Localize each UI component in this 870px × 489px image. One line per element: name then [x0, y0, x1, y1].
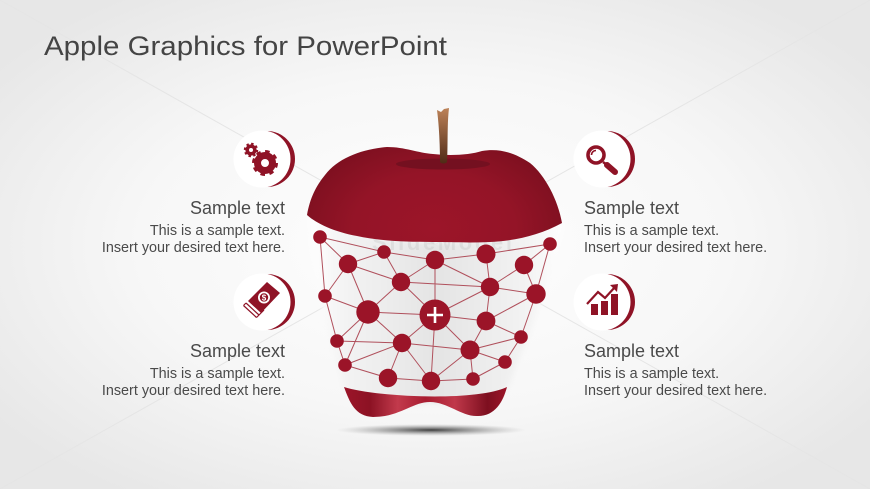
plus sign	[427, 307, 443, 323]
text block: top right: Insert your desired text here.	[584, 240, 767, 256]
text block: top right: Sample text	[584, 198, 679, 218]
text block: bottom right: This is a sample text.	[584, 366, 719, 382]
apple body	[310, 215, 563, 405]
network lines	[320, 237, 550, 381]
text block: top left: This is a sample text.	[150, 223, 285, 239]
text block: bottom left: This is a sample text.	[150, 366, 285, 382]
text block: bottom right: Sample text	[584, 341, 679, 361]
title: Apple Graphics for PowerPoint	[44, 31, 448, 61]
top red section	[307, 147, 562, 242]
apple graphic	[307, 108, 563, 436]
text block: top right	[584, 198, 767, 256]
text block: top left	[102, 198, 285, 256]
network nodes	[313, 230, 557, 390]
text block: bottom right: Insert your desired text here.	[584, 383, 767, 399]
text block: bottom left	[102, 341, 285, 399]
stem	[437, 108, 449, 164]
icon: money	[234, 274, 295, 330]
icon: growth chart	[574, 274, 635, 330]
icon: magnifier	[574, 130, 635, 188]
text block: bottom left: Insert your desired text here.	[102, 383, 285, 399]
icon: gears	[234, 130, 295, 188]
ground shadow	[336, 424, 526, 436]
text block: top left: Sample text	[190, 198, 285, 218]
icon: money: $	[262, 294, 267, 302]
stem shadow	[396, 158, 490, 170]
bottom red section	[344, 387, 507, 417]
text block: top left: Insert your desired text here.	[102, 240, 285, 256]
text block: bottom right	[584, 341, 767, 399]
text block: bottom left: Sample text	[190, 341, 285, 361]
watermark: SlideModel	[372, 230, 512, 255]
text block: top right: This is a sample text.	[584, 223, 719, 239]
